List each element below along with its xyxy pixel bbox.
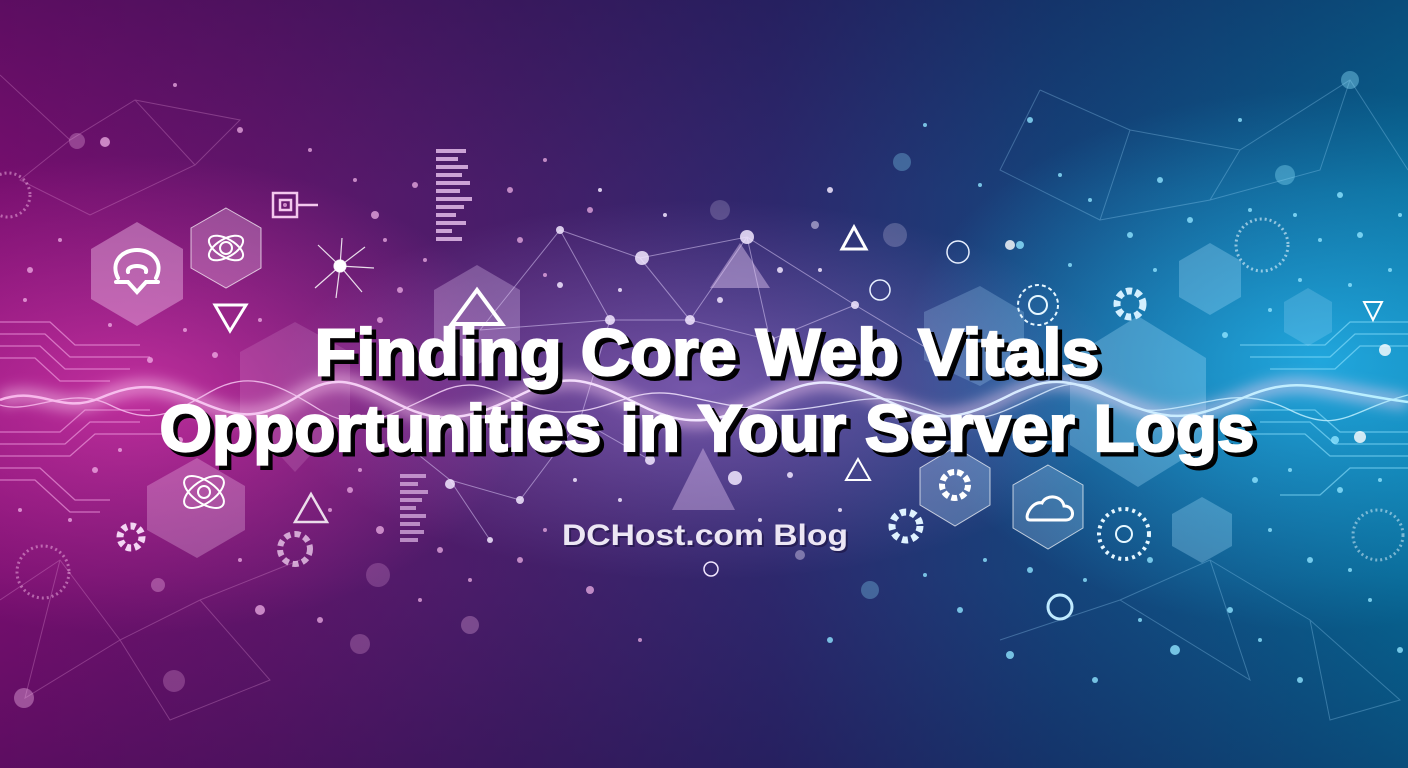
title shadow: Opportunities in Your Server Logs: [164, 395, 1258, 469]
icon: cloud: [1027, 497, 1073, 520]
icon: gears: [120, 291, 1143, 564]
icon: circuit box: [273, 193, 318, 217]
title text: [160, 315, 1254, 465]
network lines: left: [0, 75, 300, 720]
title text: Opportunities in Your Server Logs: [160, 391, 1254, 465]
hexagons: left group: [91, 208, 350, 558]
icon: triangle marks: [215, 227, 1382, 522]
circuit traces: left: [0, 322, 165, 512]
title shadow: Finding Core Web Vitals: [318, 319, 1104, 393]
title text: Finding Core Web Vitals: [314, 315, 1100, 389]
subtitle: DCHost.com Blog: [564, 521, 850, 554]
network lines: right: [1000, 80, 1408, 720]
icon: atom in upper hexagon: [205, 231, 247, 265]
circuit traces: right: [1235, 322, 1408, 495]
network lines: centre: [400, 230, 930, 540]
icon: atom in lower hexagon: [179, 470, 229, 514]
icon: starburst: [315, 238, 374, 298]
subtitle: DCHost.com Blog: [562, 519, 848, 552]
data bars: lower: [400, 474, 428, 542]
title: [160, 315, 1258, 469]
glowing sound wave: [0, 381, 1408, 422]
title shadow: [164, 319, 1258, 469]
data bars: upper: [436, 149, 472, 241]
hexagons: centre group: [434, 243, 1083, 549]
hexagons: right group: [1070, 243, 1332, 563]
icon: speech signal in left hexagon: [115, 250, 159, 292]
icon: flowers: [0, 173, 1403, 598]
